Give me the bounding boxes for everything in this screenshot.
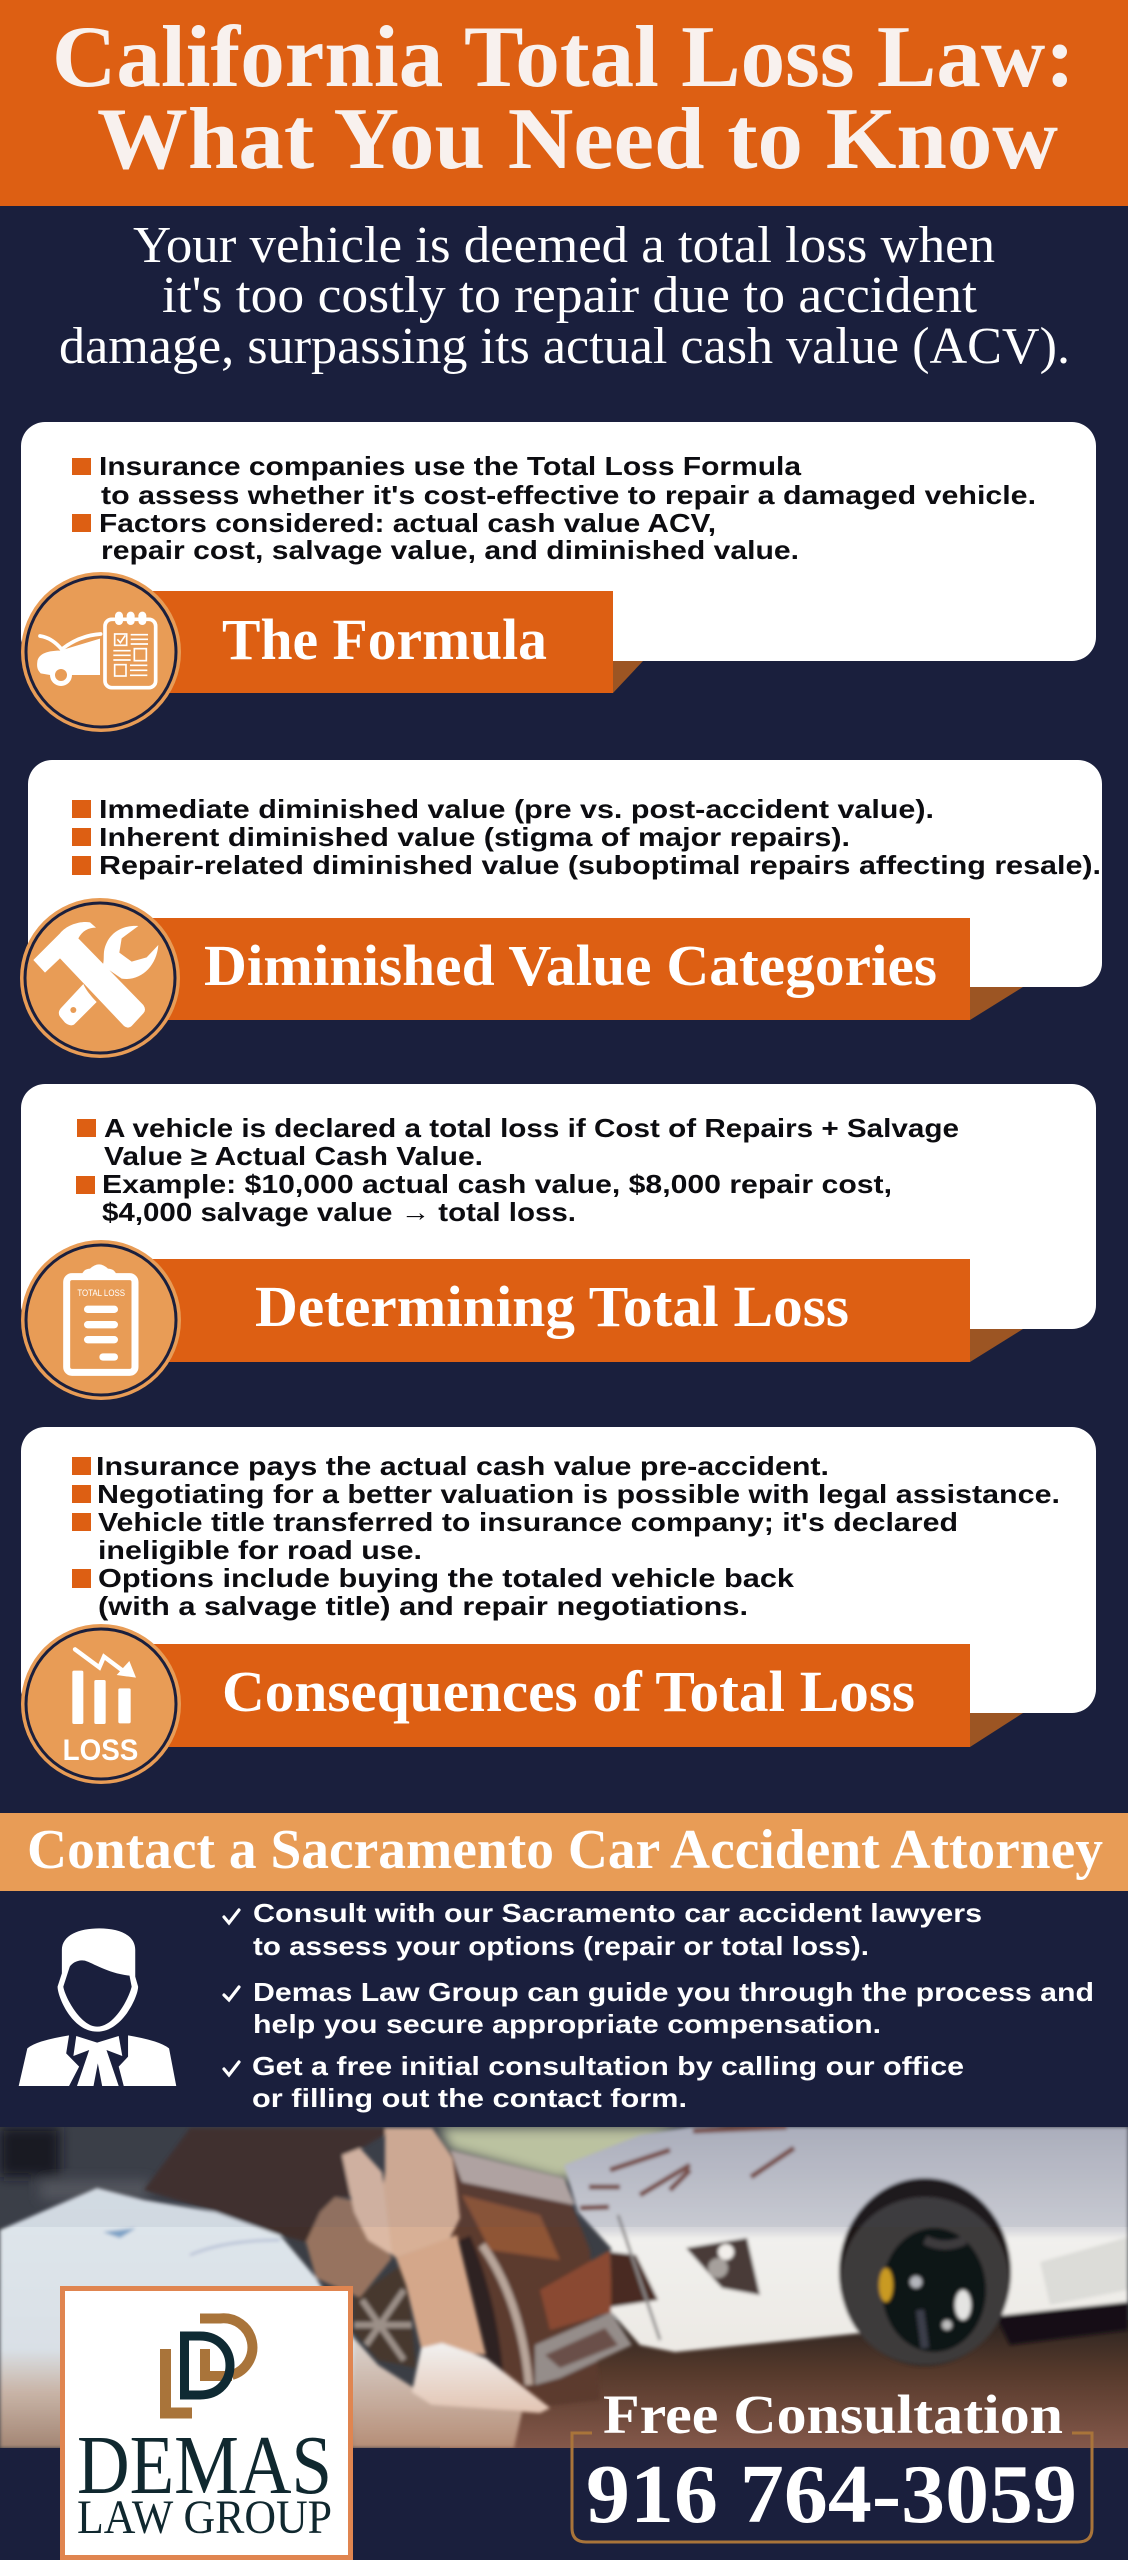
- heading ribbon: Diminished Value Categories: [100, 918, 1023, 1020]
- intro text: it's too costly to repair due to accident: [162, 267, 978, 324]
- bullet list: determining total loss: Value ≥ Actual Cash Value.: [104, 1141, 483, 1171]
- icon: attorney silhouette: [19, 1928, 176, 2086]
- contact heading bar: Contact a Sacramento Car Accident Attorney: [27, 1819, 1103, 1881]
- icon: falling chart with LOSS: LOSS: [63, 1734, 138, 1767]
- photo top tone band: [0, 2127, 1128, 2227]
- contact bullet list: [224, 1898, 1094, 2113]
- bullet list: diminished value: Repair-related diminished value (suboptimal repairs affecting resale).: [99, 850, 1101, 880]
- icon: car and checklist: [21, 572, 181, 732]
- logo: Demas Law Group: DEMAS: [77, 2419, 332, 2512]
- bullet list: formula: Insurance companies use the Total Loss Formula: [99, 451, 802, 481]
- check marks: [224, 1910, 239, 2075]
- logo mark: [166, 2318, 252, 2413]
- bullet list: consequences: (with a salvage title) and repair negotiations.: [98, 1591, 748, 1621]
- panel: consequences of total loss: [21, 1427, 1096, 1784]
- contact bullet list: Demas Law Group can guide you through the process and: [253, 1977, 1094, 2007]
- phone call to action: Free Consultation: [603, 2384, 1063, 2445]
- heading ribbon: Consequences of Total Loss: [100, 1644, 1023, 1747]
- contact bullet list: help you secure appropriate compensation.: [253, 2009, 881, 2039]
- contact bullet list: to assess your options (repair or total loss).: [253, 1931, 869, 1961]
- heading ribbon: Determining Total Loss: [100, 1259, 1023, 1362]
- intro text: Your vehicle is deemed a total loss when: [133, 217, 995, 274]
- title banner: [0, 0, 1128, 206]
- bullet list: determining total loss: [76, 1113, 959, 1227]
- bullet list: consequences: Options include buying the totaled vehicle back: [98, 1563, 795, 1593]
- heading ribbon: The Formula: The Formula: [222, 607, 547, 672]
- icon: hammer and wrench: [20, 898, 180, 1058]
- panel background: formula card: [21, 422, 1096, 661]
- heading ribbon: The Formula: [100, 591, 643, 693]
- bullet list: consequences: Vehicle title transferred to insurance company; it's declared: [98, 1507, 958, 1537]
- bullet list: formula: to assess whether it's cost-effective to repair a damaged vehicle.: [101, 480, 1036, 510]
- bullet list: consequences: Negotiating for a better valuation is possible with legal assistance.: [97, 1479, 1060, 1509]
- contact bullet list: Get a free initial consultation by calling our office: [252, 2051, 964, 2081]
- heading ribbon: Determining Total Loss: Determining Total Loss: [255, 1274, 849, 1339]
- contact bullet list: or filling out the contact form.: [252, 2083, 687, 2113]
- panel: the formula: [21, 422, 1096, 732]
- icon: total loss clipboard: TOTAL LOSS: [77, 1288, 125, 1298]
- icon: total loss clipboard: [21, 1240, 181, 1400]
- phone call to action: [572, 2384, 1092, 2542]
- panel background: diminished value card: [28, 760, 1102, 987]
- bullet list: formula: [72, 451, 1036, 565]
- icon: falling chart with LOSS: [21, 1624, 181, 1784]
- bullet list: formula: Factors considered: actual cash value ACV,: [99, 508, 716, 538]
- heading ribbon: Consequences of Total Loss: Consequences of Total Loss: [222, 1659, 915, 1724]
- contact bullet list: Consult with our Sacramento car accident lawyers: [253, 1898, 982, 1928]
- phone number outline: [572, 2433, 1092, 2542]
- heading ribbon: Diminished Value Categories: Diminished Value Categories: [204, 933, 937, 998]
- logo: Demas Law Group: LAW GROUP: [77, 2491, 332, 2544]
- intro text: [59, 217, 1070, 375]
- panel: determining total loss: [21, 1084, 1096, 1400]
- bullet list: consequences: [72, 1451, 1060, 1621]
- bullet list: consequences: Insurance pays the actual cash value pre-accident.: [96, 1451, 829, 1481]
- phone call to action: 916 764-3059: [586, 2448, 1077, 2541]
- title banner: California Total Loss Law:: [52, 9, 1075, 106]
- bullet list: formula: repair cost, salvage value, and diminished value.: [101, 535, 799, 565]
- bullet list: determining total loss: Example: $10,000 actual cash value, $8,000 repair cost,: [102, 1169, 892, 1199]
- title banner: What You Need to Know: [97, 91, 1058, 188]
- panel: diminished value categories: [20, 760, 1102, 1058]
- bullet list: consequences: ineligible for road use.: [98, 1535, 422, 1565]
- logo: Demas Law Group: [62, 2288, 350, 2558]
- bullet list: determining total loss: $4,000 salvage value → total loss.: [102, 1197, 576, 1227]
- photo: man beside crashed white car: [0, 2127, 1128, 2448]
- panel background: determining total loss card: [21, 1084, 1096, 1329]
- bullet list: diminished value: Immediate diminished value (pre vs. post-accident value).: [99, 794, 934, 824]
- bullet list: diminished value: Inherent diminished value (stigma of major repairs).: [99, 822, 850, 852]
- intro text: damage, surpassing its actual cash value (ACV).: [59, 318, 1070, 375]
- panel background: consequences card: [21, 1427, 1096, 1713]
- bullet list: diminished value: [72, 794, 1101, 880]
- bullet list: determining total loss: A vehicle is declared a total loss if Cost of Repairs + Salvage: [104, 1113, 959, 1143]
